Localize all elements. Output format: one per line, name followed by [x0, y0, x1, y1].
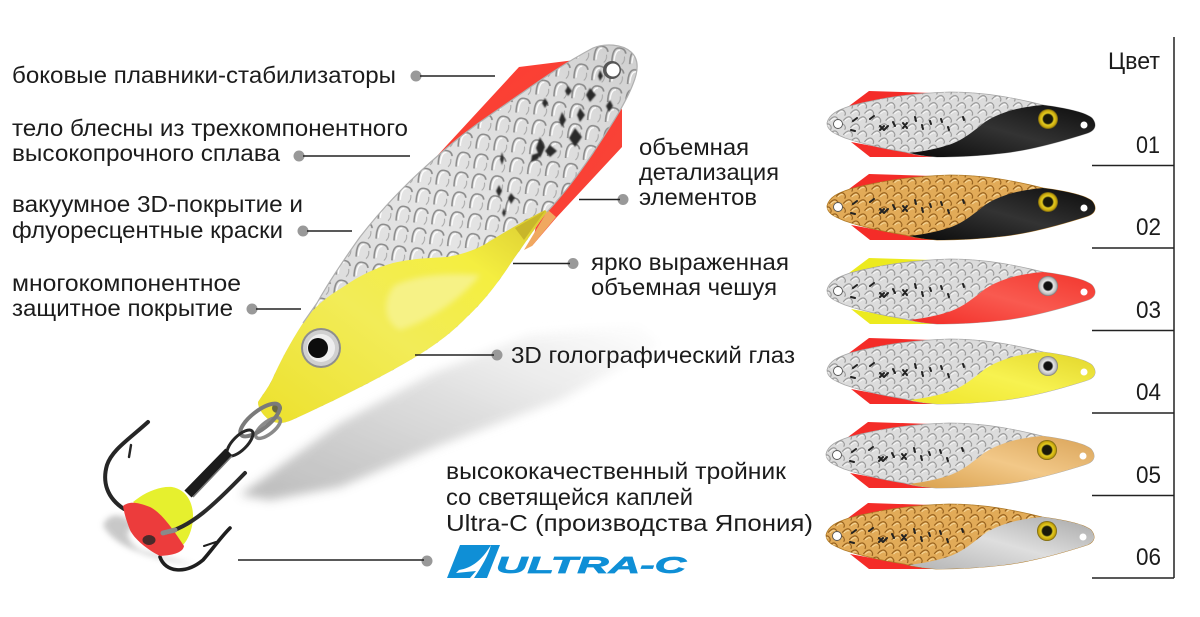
colour codes: 06: [1136, 544, 1161, 571]
callout: scales: объемная чешуя: [591, 274, 777, 300]
callout: scales: [513, 249, 789, 300]
lower barb hook: [160, 528, 230, 570]
split rings and treble hook: [105, 398, 284, 570]
hook shank: [188, 452, 229, 494]
lure 04: silver and yellow: [827, 338, 1095, 404]
lure 06: gold and silver: [826, 503, 1094, 569]
colour table: [1092, 37, 1174, 578]
callout: protective coating: [12, 270, 301, 321]
main lure: [250, 35, 650, 430]
yellow head: [250, 210, 547, 425]
callout: volumetric detail: объемная: [639, 134, 749, 160]
callout: vacuum coating: флуоресцентные краски: [12, 217, 283, 243]
red stabilizer fins: [436, 60, 622, 250]
callout: body alloy: [12, 115, 410, 166]
callout: protective coating: многокомпонентное: [12, 270, 241, 296]
callout: eye: 3D голографический глаз: [511, 342, 795, 368]
callout: vacuum coating: вакуумное 3D-покрытие и: [12, 191, 303, 217]
callout: fins: боковые плавники-стабилизаторы: [12, 62, 396, 88]
callout: treble hook: со светящейся каплей: [446, 484, 693, 510]
body edge: [303, 45, 637, 323]
glow drop bead: [123, 487, 193, 556]
split rings: [223, 398, 284, 460]
callout: protective coating: защитное покрытие: [12, 295, 233, 321]
lure 05: silver and tan: [826, 422, 1094, 488]
line-tie hole: [603, 61, 621, 79]
callout: volumetric detail: детализация: [639, 159, 779, 185]
callout: treble hook: высококачественный тройник: [446, 458, 787, 484]
silver scaled body: [250, 35, 650, 430]
colour codes: 04: [1136, 379, 1161, 406]
logo: Ultra-C: ULTRA-C: [496, 552, 687, 578]
callout: body alloy: высокопрочного сплава: [12, 140, 281, 166]
lure 01: silver and black: [827, 91, 1095, 157]
callout: volumetric detail: элементов: [639, 184, 757, 210]
callout: body alloy: тело блесны из трехкомпонентного: [12, 115, 408, 141]
left barb hook: [105, 422, 148, 509]
logo: Ultra-C: [447, 545, 687, 578]
table heading: Цвет: [1108, 48, 1160, 75]
3D holographic eye: [301, 328, 341, 368]
callout: treble hook: [238, 458, 813, 566]
lure 02: gold and black: [827, 174, 1095, 240]
callout: volumetric detail: [579, 134, 779, 210]
callout: vacuum coating: [12, 191, 352, 243]
colour codes: 03: [1136, 297, 1161, 324]
colour codes: 05: [1136, 462, 1161, 489]
lure 03: silver and red: [827, 258, 1095, 324]
callout: treble hook: Ultra-C (производства Япония): [446, 510, 813, 536]
lure shadow: [103, 325, 660, 565]
right barb hook: [163, 473, 245, 533]
colour codes: [1136, 132, 1161, 571]
lure tail hole: [272, 403, 282, 413]
callout: scales: ярко выраженная: [591, 249, 789, 275]
colour codes: 02: [1136, 214, 1161, 241]
colour codes: 01: [1136, 132, 1160, 159]
